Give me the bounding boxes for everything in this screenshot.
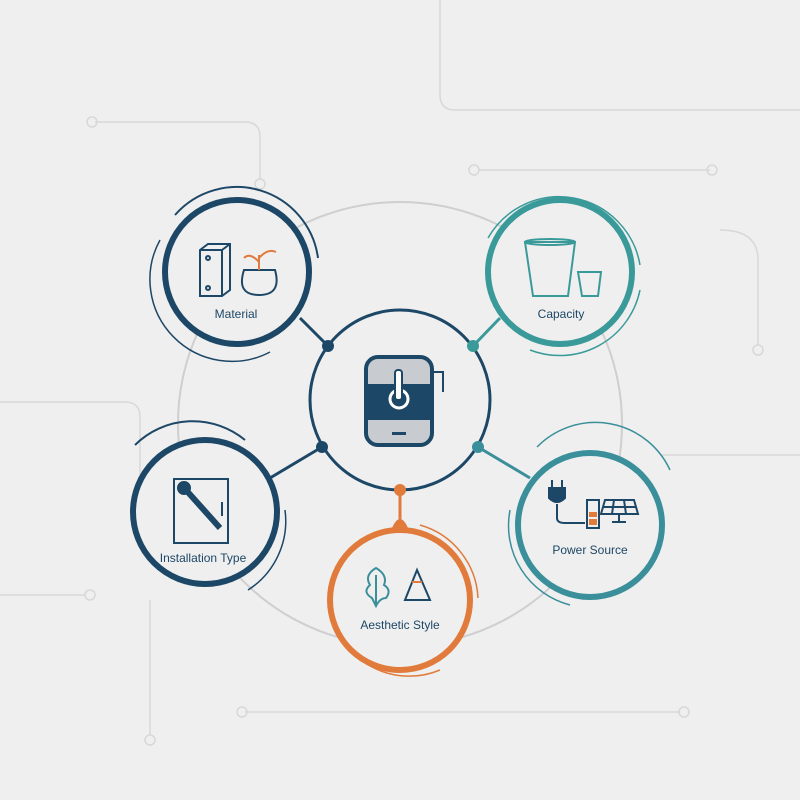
panel: capacity: [488, 197, 640, 356]
center hub: [310, 310, 490, 490]
label: Aesthetic Style: [360, 618, 440, 632]
icon: water dispenser: [366, 357, 443, 445]
panel: installation type: [133, 421, 286, 590]
panel: material: [150, 187, 318, 361]
icon: cups: [525, 239, 601, 296]
dots: [322, 340, 334, 352]
label: Capacity: [538, 307, 584, 321]
label: Installation Type: [160, 551, 247, 565]
panel: power source: [509, 422, 670, 605]
icon: wrench: [174, 479, 228, 543]
label: Power Source: [552, 543, 628, 557]
large ring: [178, 202, 622, 646]
connectors: [270, 318, 530, 528]
label: Material: [215, 307, 257, 321]
icon: plug battery solar: [549, 480, 638, 528]
icon: panel and plant: [200, 244, 277, 296]
icon: ornament and pyramid: [366, 568, 430, 606]
panel: aesthetic style: [329, 519, 478, 676]
